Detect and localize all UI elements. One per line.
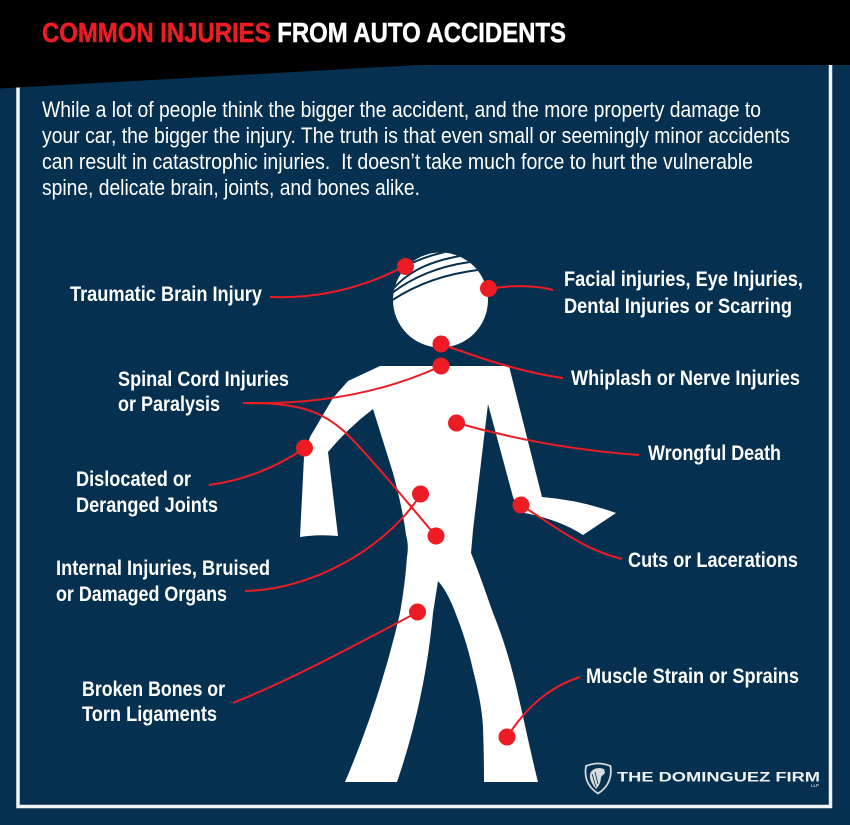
logo text: THE DOMINGUEZ FIRM [617, 770, 820, 784]
label: cuts: Cuts or Lacerations [628, 549, 798, 572]
logo suffix: LLP [811, 783, 819, 788]
label: traumatic brain injury: Traumatic Brain Injury [70, 283, 262, 306]
label: muscle strain: Muscle Strain or Sprains [586, 665, 799, 688]
label: dislocated joints: Deranged Joints [76, 494, 218, 517]
human figure [300, 252, 616, 782]
label: wrongful death: Wrongful Death [648, 442, 781, 465]
header band [0, 0, 850, 88]
logo [586, 764, 820, 794]
injury markers [296, 258, 530, 746]
label: broken bones: Torn Ligaments [82, 703, 217, 726]
intro paragraph: While a lot of people think the bigger the accident, and the more property damage to [42, 97, 761, 122]
body silhouette [300, 366, 616, 782]
label: facial injuries: Dental Injuries or Scarring [564, 295, 792, 318]
head with bandage [391, 252, 488, 348]
label: spinal cord [118, 368, 289, 416]
intro paragraph: can result in catastrophic injuries. It doesn’t take much force to hurt the vulnerable [42, 149, 753, 174]
label: broken bones: Broken Bones or [82, 678, 225, 701]
label: internal injuries: or Damaged Organs [56, 583, 227, 606]
icon: eagle shield [586, 764, 611, 794]
label: spinal cord: or Paralysis [118, 393, 220, 416]
intro paragraph [42, 97, 790, 200]
title: COMMON INJURIES FROM AUTO ACCIDENTS [42, 17, 566, 48]
intro paragraph: spine, delicate brain, joints, and bones alike. [42, 175, 420, 200]
label: dislocated joints [76, 468, 218, 517]
label: facial injuries: Facial injuries, Eye Injuries, [564, 268, 803, 291]
label: whiplash: Whiplash or Nerve Injuries [571, 367, 800, 390]
label: dislocated joints: Dislocated or [76, 468, 191, 491]
label: spinal cord: Spinal Cord Injuries [118, 368, 289, 391]
label: internal injuries: Internal Injuries, Bruised [56, 557, 270, 580]
label: facial injuries [564, 268, 803, 318]
label: internal injuries [56, 557, 270, 606]
connector lines [209, 266, 639, 737]
label: broken bones [82, 678, 225, 726]
